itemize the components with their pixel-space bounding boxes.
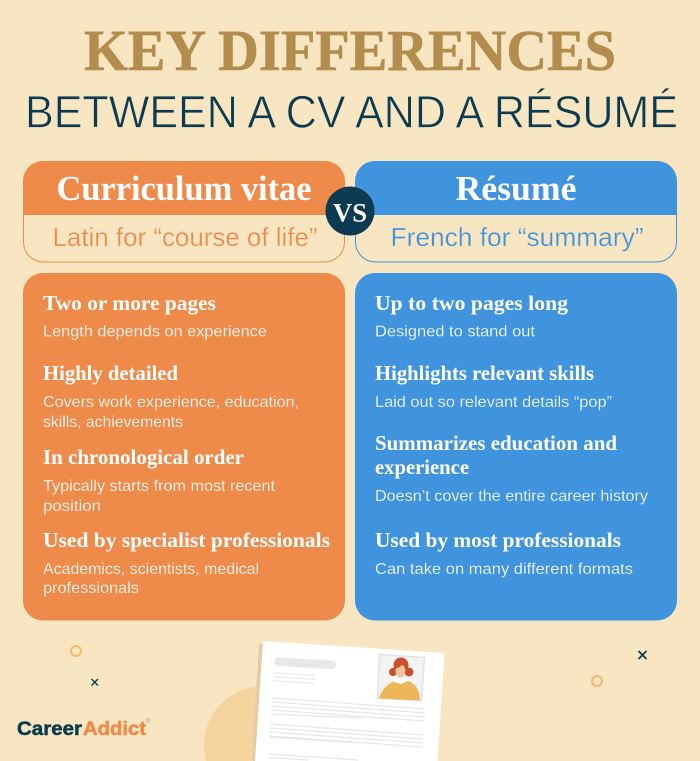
résumé item: skills: Highlights relevant skills [375,361,594,385]
title: KEY DIFFERENCES [84,18,616,83]
logo: careeraddict: Career [17,719,83,740]
cv item: order: position [43,498,101,515]
background semicircle [204,686,256,761]
résumé item: summary: experience [375,455,469,479]
decorative cross: left [92,679,98,686]
panel: résumé details [355,273,677,620]
cv item: specialists: Used by specialist professionals [43,528,330,552]
contact lines [274,673,315,683]
collar [393,677,408,684]
résumé item: professionals: Can take on many different formats [375,561,633,578]
résumé item: skills: Laid out so relevant details “pop” [375,394,612,411]
résumé item: professionals: Used by most professionals [375,528,621,552]
résumé item: length [375,291,569,340]
decorative cross: right [638,651,646,659]
panel: curriculum vitae header [23,161,345,262]
paper shadow [252,644,264,761]
title [25,18,678,138]
cv item: order [43,445,276,515]
cv item: pages: Two or more pages [43,291,216,315]
logo: careeraddict: ® [146,718,151,725]
résumé item: length: Designed to stand out [375,324,536,340]
résumé item: professionals [375,528,633,578]
sweater [379,680,420,700]
résumé item: summary [375,431,648,505]
panel: curriculum vitae header: Latin for “course of life” [52,222,318,252]
cv item: pages [43,291,267,340]
panel: résumé header [355,161,677,262]
cv item: detail: Covers work experience, education, [43,394,299,411]
panel: résumé header: Résumé [456,169,576,208]
cv item: specialists: professionals [43,580,139,597]
decorative circle: top left [71,646,81,656]
résumé item: summary: Doesn’t cover the entire career history [375,488,648,505]
cv item: order: Typically starts from most recent [43,478,276,495]
résumé item: length: Up to two pages long [375,291,569,315]
illustration: résumé document [204,641,444,761]
cv item: detail [43,361,299,431]
face [396,664,406,678]
résumé item: summary: Summarizes education and [375,431,617,455]
logo: careeraddict [17,718,151,740]
logo: careeraddict: Addict [83,719,147,740]
decorative circle: right [592,676,602,686]
portrait [378,654,424,701]
title: BETWEEN A CV AND A RÉSUMÉ [25,86,678,138]
cv item: pages: Length depends on experience [43,324,267,340]
vs badge [326,186,374,236]
name bar [278,662,332,665]
cv item: order: In chronological order [43,445,244,469]
cv item: specialists [43,528,330,597]
panel: résumé header: French for “summary” [390,222,644,252]
résumé item: skills [375,361,612,411]
hair back [389,658,414,676]
fringe [394,664,404,668]
cv item: detail: Highly detailed [43,361,178,385]
panel: cv details [23,273,345,620]
body text lines [268,698,425,760]
vs badge: VS [333,198,367,228]
cv item: detail: skills, achievements [43,414,183,431]
panel: curriculum vitae header: Curriculum vitae [56,169,312,208]
paper sheet [255,641,444,761]
cv item: specialists: Academics, scientists, medical [43,561,259,578]
